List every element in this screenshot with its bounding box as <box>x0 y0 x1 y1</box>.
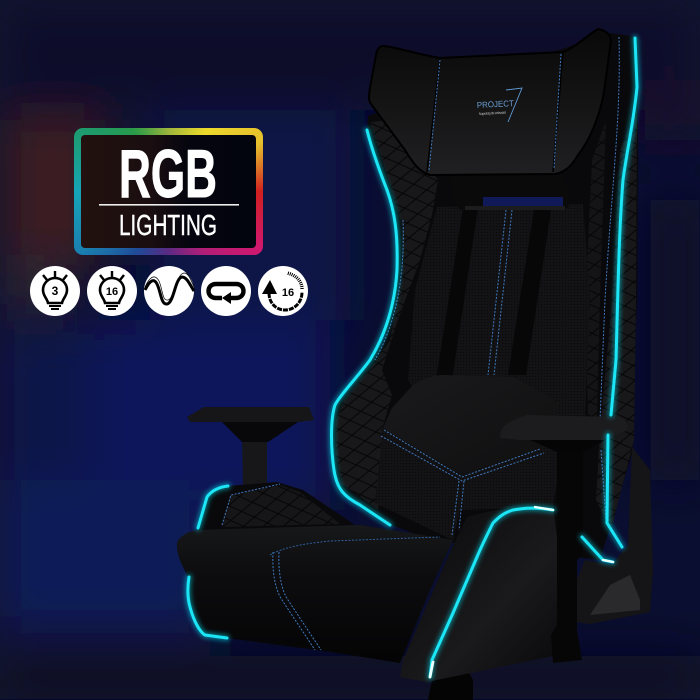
divider <box>99 204 239 206</box>
icon: 3 colour bulb <box>30 266 80 316</box>
straps <box>436 208 478 380</box>
seat <box>177 525 453 663</box>
quilted right wing <box>596 110 637 530</box>
logo: Project 7: Supporting the enthusiast <box>479 111 506 116</box>
icon: 16 colour bulb: 16 <box>106 286 118 298</box>
icon: loop mode <box>201 266 251 316</box>
icon: wave breathing mode <box>144 266 194 316</box>
icon: 16 step cycle <box>258 266 308 316</box>
backrest <box>331 33 638 560</box>
icon: 3 colour bulb: 3 <box>52 284 59 298</box>
right mechanism bracket <box>560 447 653 624</box>
icon: 16 colour bulb <box>87 266 137 316</box>
right side seat panel <box>400 507 560 682</box>
logo: Project 7 <box>477 88 522 122</box>
chair base column <box>428 667 473 700</box>
centre perforated back panel <box>408 204 590 420</box>
left seat bolster <box>197 482 355 532</box>
left armrest <box>187 407 314 485</box>
right armrest <box>500 415 628 663</box>
quilted left wing <box>336 120 438 510</box>
badge: RGB Lighting <box>74 128 263 255</box>
badge inner panel <box>81 135 256 248</box>
headrest <box>369 29 611 175</box>
LIGHTING label: LIGHTING <box>119 210 217 242</box>
icon: 16 step cycle: 16 <box>282 287 294 299</box>
cyan LED strips <box>188 38 637 677</box>
headrest mount and gap <box>450 172 570 210</box>
logo: Project 7: PROJECT <box>477 98 514 110</box>
lumbar cushion <box>375 375 565 540</box>
back stitching <box>375 37 619 520</box>
